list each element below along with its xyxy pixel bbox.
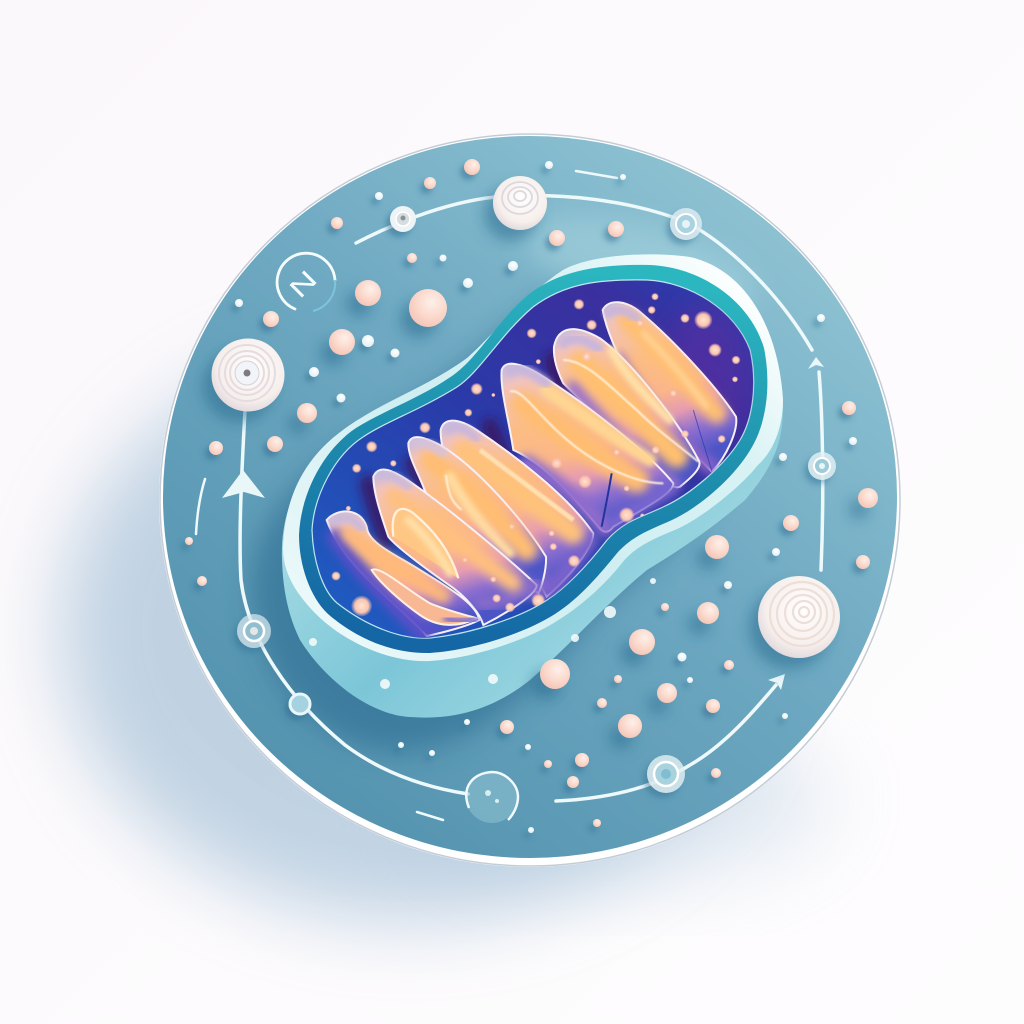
- crista 3: [408, 437, 546, 593]
- illustration: mitochondrion on a disc: [16, 133, 901, 960]
- arrowheads: [222, 357, 824, 690]
- inner teal wall: [299, 265, 767, 653]
- white particles: [235, 161, 857, 833]
- mitochondrion shadow on disc: [252, 293, 741, 752]
- ring node bottom right: [647, 755, 685, 793]
- top rim surface: [283, 254, 783, 661]
- peach particles: [185, 159, 870, 827]
- matrix granules: [331, 293, 740, 616]
- line: right vertical: [819, 372, 823, 570]
- glass node bottom: [466, 771, 518, 823]
- shell node: right large: [758, 576, 840, 658]
- matrix purple haze: [665, 300, 755, 440]
- light sheen around body: [514, 195, 766, 335]
- ring node lower left: [290, 694, 310, 714]
- shell node: left large: [212, 338, 284, 412]
- crista 1: [327, 511, 479, 636]
- line: bottom right arc: [556, 685, 776, 801]
- pathway lines and arrows: [196, 171, 823, 820]
- short ticks: [196, 171, 617, 820]
- mitochondrion body: [282, 254, 783, 718]
- crista 4: [441, 421, 593, 597]
- wall dots: [309, 578, 656, 689]
- shell node: top: [493, 176, 547, 230]
- crista 7: [603, 302, 736, 472]
- dark valleys between folds: [368, 360, 563, 540]
- ring node left: [237, 614, 271, 648]
- crista 6: [554, 329, 700, 487]
- ring node right: [808, 452, 836, 480]
- line: top arc: [356, 196, 812, 350]
- panel: circular disc: [159, 133, 901, 867]
- ring nodes on the pathway: [237, 206, 836, 793]
- crista 2: [373, 470, 537, 625]
- small particles: [185, 159, 870, 833]
- line: left arc: [240, 410, 468, 794]
- cristae folds: [327, 293, 755, 636]
- icon: N badge: N: [283, 264, 323, 304]
- crista 5: [501, 364, 673, 532]
- matrix lumen: [312, 280, 754, 638]
- ring node top left: [390, 206, 416, 232]
- peach spheres large: [297, 280, 878, 738]
- ring node top right: [670, 208, 702, 240]
- disc cast shadow: [60, 340, 830, 920]
- outer membrane wall: [282, 254, 783, 718]
- icon: N badge: [277, 253, 335, 311]
